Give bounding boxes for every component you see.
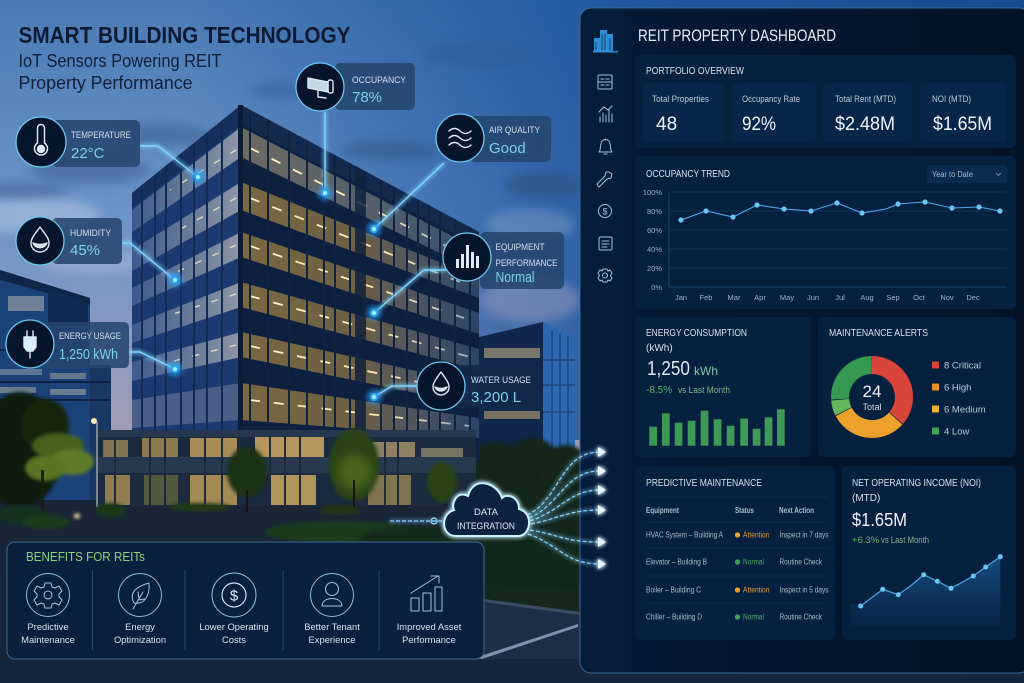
icon: buildings logo — [593, 30, 618, 52]
icon: data integration cloud: DATA — [474, 507, 499, 518]
icon: growth chart — [599, 106, 612, 122]
callout: air quality: Good — [489, 140, 526, 157]
callout: energy usage: 1,250 kWh — [59, 346, 118, 363]
main office building — [98, 100, 479, 510]
trees and landscaping — [0, 392, 480, 550]
card: total properties — [643, 83, 724, 143]
subtitle — [18, 51, 222, 93]
callout: temperature — [16, 117, 140, 167]
donut chart: alerts — [840, 365, 904, 429]
ground, hedges and parking lot — [0, 438, 1024, 683]
panel: energy consumption: kWh — [694, 364, 718, 378]
callout: humidity: HUMIDITY — [70, 228, 112, 239]
callout: temperature: TEMPERATURE — [71, 130, 131, 141]
benefit: lower operating costs — [199, 573, 269, 645]
panel: net operating income: vs Last Month — [881, 535, 929, 545]
area chart: NOI — [851, 554, 1003, 626]
title: SMART BUILDING TECHNOLOGY — [18, 22, 350, 48]
callout: water usage: 3,200 L — [471, 389, 521, 406]
bar chart: energy — [649, 409, 785, 446]
line chart: occupancy: Sep — [886, 293, 900, 302]
panel: benefits for REITs — [7, 542, 484, 659]
panel: portfolio overview — [635, 55, 1016, 148]
benefit: lower operating costs: Costs — [222, 634, 246, 645]
callout: air quality — [436, 114, 551, 162]
icon: grid report — [598, 75, 612, 89]
line chart: occupancy — [643, 188, 1007, 302]
icon: power plug — [24, 331, 36, 358]
panel: net operating income: +6.3% — [852, 535, 880, 546]
table row: HVAC: Inspect in 7 days — [780, 530, 829, 540]
data flow lines into dashboard — [390, 447, 606, 569]
dropdown: year to date: Year to Date — [932, 170, 973, 179]
benefit: improved asset performance: Improved Asset — [397, 621, 462, 632]
table row: elevator: Elevator – Building B — [646, 558, 707, 566]
line chart: occupancy: Nov — [940, 293, 954, 302]
card: NOI: NOI (MTD) — [932, 94, 971, 104]
icon: thermometer — [34, 125, 48, 155]
panel: predictive maintenance — [635, 466, 835, 640]
benefit: better tenant experience: Better Tenant — [304, 621, 360, 632]
benefit: improved asset performance: Performance — [402, 634, 456, 645]
icon: data integration cloud: INTEGRATION — [457, 521, 515, 532]
table header — [646, 506, 814, 515]
table row: elevator: Routine Check — [780, 558, 822, 566]
panel: energy consumption: 1,250 — [647, 358, 690, 380]
panel: occupancy trend — [635, 156, 1016, 309]
icon: water drop — [433, 372, 449, 395]
callout: occupancy: 78% — [352, 89, 382, 106]
card: total rent: Total Rent (MTD) — [835, 94, 896, 104]
card: total rent: $2.48M — [835, 114, 895, 135]
legend: alert levels: 6 Medium — [944, 404, 986, 416]
benefit: energy optimization: Energy — [125, 621, 155, 632]
callout: water usage — [417, 362, 540, 410]
line chart: occupancy: 0% — [651, 283, 662, 292]
icon: dollar — [598, 204, 612, 218]
legend: alert levels: 8 Critical — [944, 360, 981, 372]
table header: Equipment — [646, 506, 679, 515]
callout: air quality: AIR QUALITY — [489, 125, 541, 136]
benefit: lower operating costs: $ — [230, 588, 239, 604]
panel: maintenance alerts: 24 — [863, 382, 881, 401]
icon: water drop — [31, 227, 49, 252]
panel: maintenance alerts: Total — [862, 402, 882, 412]
callout: temperature: 22°C — [71, 145, 105, 162]
benefit: better tenant experience: Experience — [309, 634, 355, 645]
line chart: occupancy: Jul — [835, 293, 845, 302]
table row: boiler: Inspect in 5 days — [780, 586, 829, 594]
background building: right — [479, 322, 575, 460]
panel: net operating income: NET OPERATING INCOME (NOI) — [852, 478, 981, 489]
panel: net operating income: (MTD) — [852, 493, 880, 504]
benefit: lower operating costs: Lower Operating — [199, 621, 269, 632]
icon: settings gear — [598, 269, 612, 282]
table row: HVAC: Attention — [743, 530, 770, 540]
line chart: occupancy: Feb — [700, 293, 712, 302]
table row: boiler: Attention — [743, 586, 770, 594]
table row: elevator — [646, 558, 822, 566]
callout: energy usage — [6, 320, 129, 368]
panel: net operating income — [842, 466, 1016, 640]
line chart: occupancy: May — [780, 293, 794, 302]
panel: occupancy trend: OCCUPANCY TREND — [646, 169, 730, 180]
line chart: occupancy: Dec — [966, 293, 980, 302]
legend: alert levels: 6 High — [944, 382, 971, 394]
card: NOI: $1.65M — [933, 114, 992, 135]
panel: energy consumption: (kWh) — [646, 343, 673, 354]
subtitle: Property Performance — [18, 73, 192, 93]
dashboard sidebar — [581, 9, 625, 672]
card: occupancy rate — [732, 83, 816, 143]
panel: energy consumption: vs Last Month — [678, 385, 730, 395]
table header: Next Action — [779, 506, 814, 515]
panel: net operating income: $1.65M — [852, 510, 907, 530]
card: total properties: Total Properties — [652, 94, 709, 104]
callout: occupancy — [296, 63, 415, 111]
legend: alert levels — [932, 360, 986, 438]
benefit: predictive maintenance: Maintenance — [21, 634, 75, 645]
benefit: better tenant experience — [304, 574, 360, 645]
subtitle: IoT Sensors Powering REIT — [18, 51, 222, 71]
icon: bar chart — [456, 245, 479, 268]
line chart: occupancy: 60% — [647, 226, 662, 235]
panel: energy consumption: ENERGY CONSUMPTION — [646, 328, 747, 339]
callout: humidity: 45% — [70, 242, 100, 259]
icon: wrench — [597, 172, 612, 187]
callout: equipment performance: PERFORMANCE — [496, 258, 558, 269]
panel: maintenance alerts — [818, 317, 1016, 457]
benefit: predictive maintenance: Predictive — [27, 621, 69, 632]
benefit: predictive maintenance — [21, 574, 75, 645]
panel: predictive maintenance: PREDICTIVE MAINTENANCE — [646, 478, 762, 489]
table row: chiller: Routine Check — [780, 612, 822, 622]
background building: left — [0, 270, 111, 510]
icon: data integration cloud — [444, 483, 529, 536]
line chart: occupancy: 40% — [647, 245, 662, 254]
panel: portfolio overview: PORTFOLIO OVERVIEW — [646, 66, 744, 77]
card: total properties: 48 — [656, 114, 677, 135]
callout: equipment performance: EQUIPMENT — [496, 242, 545, 253]
legend: alert levels: 4 Low — [944, 426, 969, 438]
icon: document — [599, 237, 612, 250]
sensor connector lines — [122, 112, 446, 405]
line chart: occupancy: Oct — [913, 293, 926, 302]
benefit: energy optimization: Optimization — [114, 634, 166, 645]
card: total rent — [823, 83, 912, 143]
card: occupancy rate: 92% — [742, 114, 776, 135]
benefit: energy optimization — [114, 574, 166, 645]
dashboard heading: REIT PROPERTY DASHBOARD — [638, 27, 836, 45]
card: NOI — [920, 83, 1007, 143]
arrowheads — [598, 447, 606, 569]
title block — [18, 22, 350, 93]
table row: HVAC: HVAC System – Building A — [646, 530, 724, 540]
callout: energy usage: ENERGY USAGE — [59, 331, 121, 342]
callout: humidity — [16, 217, 122, 265]
line chart: occupancy: 80% — [647, 207, 662, 216]
icon: security camera — [308, 78, 333, 98]
table row: elevator: Normal — [743, 558, 764, 566]
building: lit ground floors — [98, 430, 476, 506]
panel: REIT property dashboard — [580, 8, 1024, 673]
line chart: occupancy: Jun — [807, 293, 819, 302]
panel: energy consumption: -8.5% — [646, 385, 672, 396]
table row: chiller — [646, 612, 822, 622]
building: right facade — [238, 105, 479, 462]
line chart: occupancy: Apr — [754, 293, 766, 302]
panel: maintenance alerts: MAINTENANCE ALERTS — [829, 328, 928, 339]
icon: bell — [599, 139, 612, 154]
callout: water usage: WATER USAGE — [471, 375, 531, 386]
icon: air waves — [449, 128, 471, 148]
card: occupancy rate: Occupancy Rate — [742, 94, 800, 104]
building: left facade — [132, 108, 238, 430]
callout: equipment performance — [443, 232, 564, 289]
table row: boiler — [646, 586, 829, 594]
table header: Status — [735, 506, 755, 515]
heading: benefits: BENEFITS FOR REITs — [26, 550, 145, 564]
callout: occupancy: OCCUPANCY — [352, 75, 407, 86]
line chart: occupancy: Jan — [675, 293, 687, 302]
line chart: occupancy: 20% — [647, 264, 662, 273]
panel: energy consumption — [635, 317, 811, 457]
table row: HVAC — [646, 530, 829, 540]
table row: chiller: Normal — [743, 612, 764, 622]
line chart: occupancy: Aug — [860, 293, 874, 302]
table row: boiler: Boiler – Building C — [646, 586, 701, 594]
line chart: occupancy: Mar — [728, 293, 741, 302]
line chart: occupancy: 100% — [643, 188, 662, 197]
icon: dollar glyph: $ — [602, 206, 608, 216]
callout: equipment performance: Normal — [496, 269, 534, 286]
dropdown: year to date — [927, 165, 1007, 183]
benefit: improved asset performance — [397, 576, 462, 645]
table row: chiller: Chiller – Building D — [646, 612, 702, 622]
